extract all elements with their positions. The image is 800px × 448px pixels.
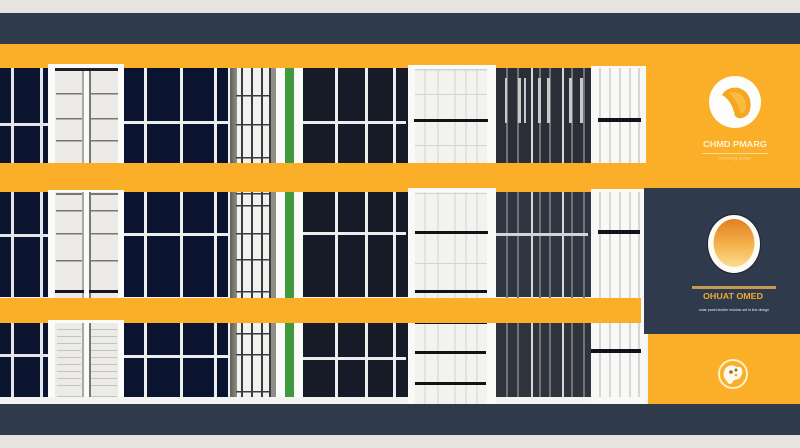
louvre panel F [408,65,496,404]
logo title: CHMD PMARG [703,139,767,149]
orange band middle [0,163,800,192]
green stripe with white borders [276,68,303,397]
card caption: solar panel shutter window set in line design [699,307,769,312]
icon: circular badge [719,360,747,388]
grille panel D [228,68,276,397]
white panel H [591,66,646,404]
window column C [124,68,228,397]
white panel tops overlapping orange bands [48,64,646,323]
bottom navy band [0,404,800,435]
card title: OHUAT OMED [703,291,763,301]
right panel: dark card [644,188,800,334]
orange band top [0,44,800,68]
shutter panel B [48,64,124,397]
white building backing [0,44,648,404]
logo underline [702,152,768,155]
divider bar [692,286,776,289]
dark slatted column G [496,68,591,397]
logo subtitle: coming solar [719,156,752,160]
icon: white ring with sun [709,76,761,128]
right panel: lower orange with badge [648,334,800,404]
top navy band [0,13,800,44]
window column E [303,68,408,397]
icon: glowing oval [707,214,761,274]
orange band lower [0,298,641,323]
right panel: logo [646,44,800,190]
window column A [0,68,48,397]
